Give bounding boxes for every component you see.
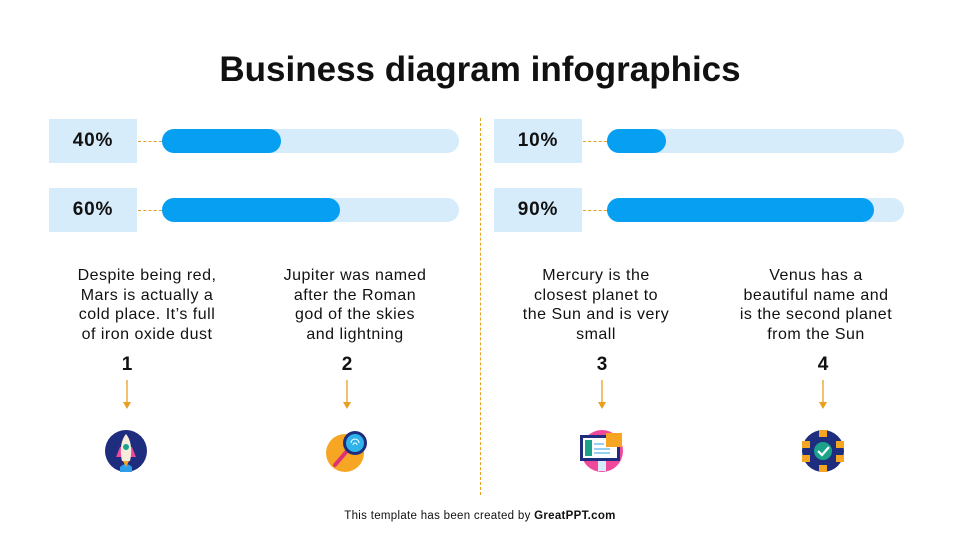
- text block 4: [740, 267, 892, 342]
- bar row: 40%: [49, 119, 459, 163]
- bar row: 40%: 40%: [73, 130, 113, 151]
- bar row: 90%: [494, 188, 904, 232]
- text block 3: small: [576, 326, 616, 342]
- title: Business diagram infographics: [219, 50, 741, 89]
- text block 1: Despite being red,: [78, 267, 216, 284]
- number 2: 2: [342, 354, 352, 375]
- text block 2: and lightning: [306, 326, 404, 342]
- icon: monitor folder: [580, 430, 623, 472]
- text block 3: the Sun and is very: [523, 306, 669, 323]
- text block 4: beautiful name and: [743, 286, 889, 304]
- text block 3: Mercury is the: [542, 267, 650, 284]
- text block 4: from the Sun: [767, 326, 865, 342]
- text block 2: after the Roman: [294, 286, 416, 304]
- text block 1: of iron oxide dust: [82, 326, 212, 342]
- bar row: 90%: 90%: [518, 199, 558, 220]
- number 1: 1: [122, 354, 132, 375]
- text block 2: god of the skies: [295, 306, 415, 323]
- arrow 2: [343, 380, 351, 409]
- number 4: 4: [818, 354, 828, 375]
- icon: rocket: [105, 430, 147, 472]
- bar row: 60%: [49, 188, 459, 232]
- bar row: 60%: 60%: [73, 199, 113, 220]
- icon: network shield: [802, 430, 844, 472]
- footer: This template has been created by GreatPPT.com: [344, 510, 616, 522]
- arrow 4: [819, 380, 827, 409]
- text block 4: is the second planet: [740, 306, 892, 323]
- icon: fingerprint magnifier: [326, 431, 367, 472]
- text block 2: [284, 267, 426, 342]
- bar row: 10%: 10%: [518, 130, 558, 151]
- text block 4: Venus has a: [769, 267, 863, 284]
- arrow 3: [598, 380, 606, 409]
- divider: [480, 118, 481, 495]
- text block 3: closest planet to: [534, 286, 658, 304]
- text block 2: Jupiter was named: [284, 267, 426, 284]
- text block 1: Mars is actually a: [81, 286, 213, 304]
- arrow 1: [123, 380, 131, 409]
- text block 1: cold place. It’s full: [79, 306, 215, 323]
- text block 3: [523, 267, 669, 342]
- bar row: 10%: [494, 119, 904, 163]
- number 3: 3: [597, 354, 607, 375]
- text block 1: [78, 267, 216, 342]
